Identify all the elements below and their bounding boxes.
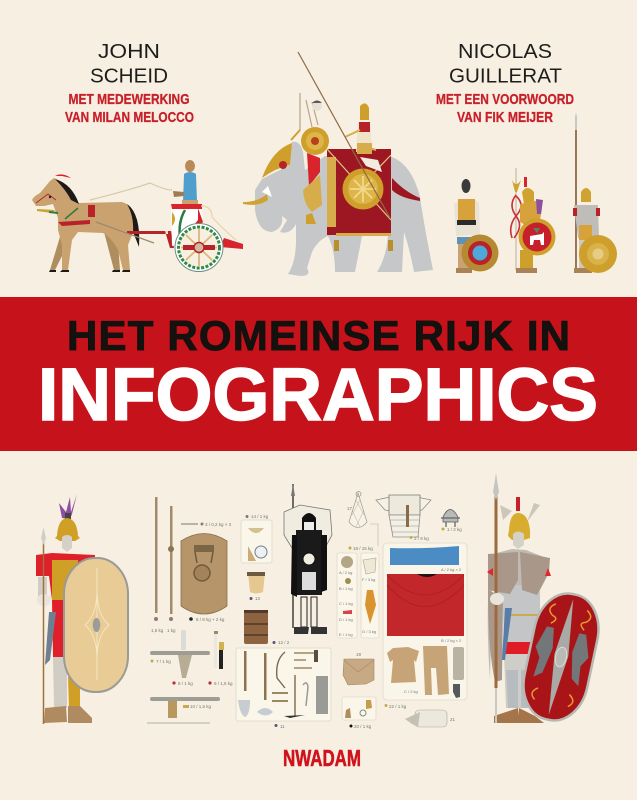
elephant tusk xyxy=(243,194,268,205)
armoured belt xyxy=(147,697,220,723)
javelins: 1,5 kg xyxy=(151,628,164,633)
rectangular shield: 6 / 8 kg + 2 kg xyxy=(196,617,225,622)
red shield with griffins xyxy=(516,588,606,726)
tools box xyxy=(236,648,331,729)
helmet xyxy=(500,497,540,549)
clothing box: B / 2 kg × 2 xyxy=(441,638,462,643)
title line one: HET ROMEINSE RIJK IN xyxy=(67,312,570,359)
author block: Nicolas Guillerat: NICOLAS xyxy=(458,40,552,63)
swords and belts xyxy=(150,630,233,686)
armoured belt: 10 / 1,5 kg xyxy=(190,704,212,709)
mess kit box: 14 / 1 kg xyxy=(251,514,269,519)
spear xyxy=(42,540,44,724)
illustration: war elephant with riders xyxy=(243,52,433,276)
soldier one xyxy=(454,179,498,273)
cuirass xyxy=(376,495,431,541)
chariot wheel xyxy=(175,224,223,272)
clothing box: C / 2 kg xyxy=(404,689,418,694)
food box right: G / 3 kg xyxy=(362,629,376,634)
black and white soldier xyxy=(284,484,332,634)
swords and belts: 8 / 1 kg xyxy=(178,681,193,686)
barrel xyxy=(244,610,290,645)
author block: John Scheid xyxy=(65,40,194,126)
rectangular shield xyxy=(181,534,227,622)
helmet xyxy=(441,510,462,532)
elephant rider with helmet xyxy=(345,103,376,154)
rolled tent: 21 xyxy=(450,717,456,722)
round gold shield on elephant xyxy=(342,168,384,210)
label 22: 22 / 1 kg xyxy=(389,704,407,709)
author block: Nicolas Guillerat: VAN FIK MEIJER xyxy=(457,110,553,126)
javelins xyxy=(151,497,176,633)
horse xyxy=(32,174,139,272)
swords and belts: 7 / 1 kg xyxy=(156,659,171,664)
dagger sketch xyxy=(181,522,232,527)
food box left: A / 2 kg xyxy=(339,570,352,575)
chariot pole xyxy=(127,231,174,248)
helmet: 1 / 2 kg xyxy=(447,527,462,532)
soldier three xyxy=(573,112,617,273)
saddle cloth xyxy=(327,149,420,251)
blue cloak xyxy=(390,546,459,565)
second rider with spear and shield xyxy=(298,52,390,218)
food box left: D / 1 kg xyxy=(339,617,353,622)
elephant body xyxy=(255,142,433,276)
oval shield xyxy=(64,558,128,692)
soldier two xyxy=(511,168,556,273)
elephant head armour xyxy=(262,130,300,178)
illustration: three soldiers xyxy=(454,112,617,273)
chart: equipment of a legionary xyxy=(147,484,467,729)
small items box: 20 / 1 kg xyxy=(354,724,372,729)
net bag: 17 xyxy=(347,506,353,511)
leather bag: 19 xyxy=(356,652,362,657)
gray cloth xyxy=(453,647,464,680)
elephant chest cloth and harness xyxy=(307,153,320,186)
pot: 13 xyxy=(255,596,261,601)
pot xyxy=(247,572,265,601)
food box left: B / 1 kg xyxy=(339,586,353,591)
clothing box xyxy=(383,543,467,700)
author block: John Scheid: JOHN xyxy=(98,40,160,63)
author block: Nicolas Guillerat xyxy=(436,40,574,126)
food box left: C / 1 kg xyxy=(339,601,353,606)
beige tunic xyxy=(387,647,419,683)
javelins: 1 kg xyxy=(167,628,176,633)
mess kit box xyxy=(241,514,272,563)
clothing box: A / 2 kg × 2 xyxy=(441,567,462,572)
red tunic cloth xyxy=(387,574,464,636)
illustration: legionary with oval shield xyxy=(36,494,128,724)
chariot driver xyxy=(173,160,198,204)
net bag xyxy=(347,492,378,546)
chariot body xyxy=(171,204,243,249)
food box left: E / 1 kg xyxy=(339,632,353,637)
illustration: horse and chariot xyxy=(32,160,243,272)
leather bag xyxy=(343,652,374,685)
author block: John Scheid: SCHEID xyxy=(90,64,168,88)
mail armour and cape xyxy=(487,549,551,682)
trousers xyxy=(423,646,449,695)
food box right xyxy=(361,553,379,638)
author block: John Scheid: MET MEDEWERKING xyxy=(68,92,190,108)
legs and boots xyxy=(494,654,544,723)
title line two: INFOGRAPHICS xyxy=(38,353,598,436)
food box right: F / 3 kg xyxy=(362,577,375,582)
cuirass: 2 / 9 kg xyxy=(414,536,429,541)
dagger sketch: 3 / 0,2 kg × 3 xyxy=(205,522,232,527)
food box left xyxy=(337,546,373,638)
tools box: 11 xyxy=(280,724,285,729)
author block: Nicolas Guillerat: GUILLERAT xyxy=(449,64,562,88)
spear xyxy=(490,473,512,723)
illustration: legionary with red shield xyxy=(487,473,606,726)
title banner xyxy=(0,297,637,451)
publisher logo: NWADAM xyxy=(283,745,361,771)
reins and pole xyxy=(90,183,172,232)
author block: Nicolas Guillerat: MET EEN VOORWOORD xyxy=(436,92,574,108)
author block: John Scheid: VAN MILAN MELOCCO xyxy=(65,110,194,126)
food box left: 18 / 15 kg xyxy=(353,546,373,551)
barrel: 12 / 2 xyxy=(278,640,290,645)
swords and belts: 9 / 1,5 kg xyxy=(214,681,233,686)
rolled tent xyxy=(405,710,456,727)
small items box xyxy=(342,697,376,729)
